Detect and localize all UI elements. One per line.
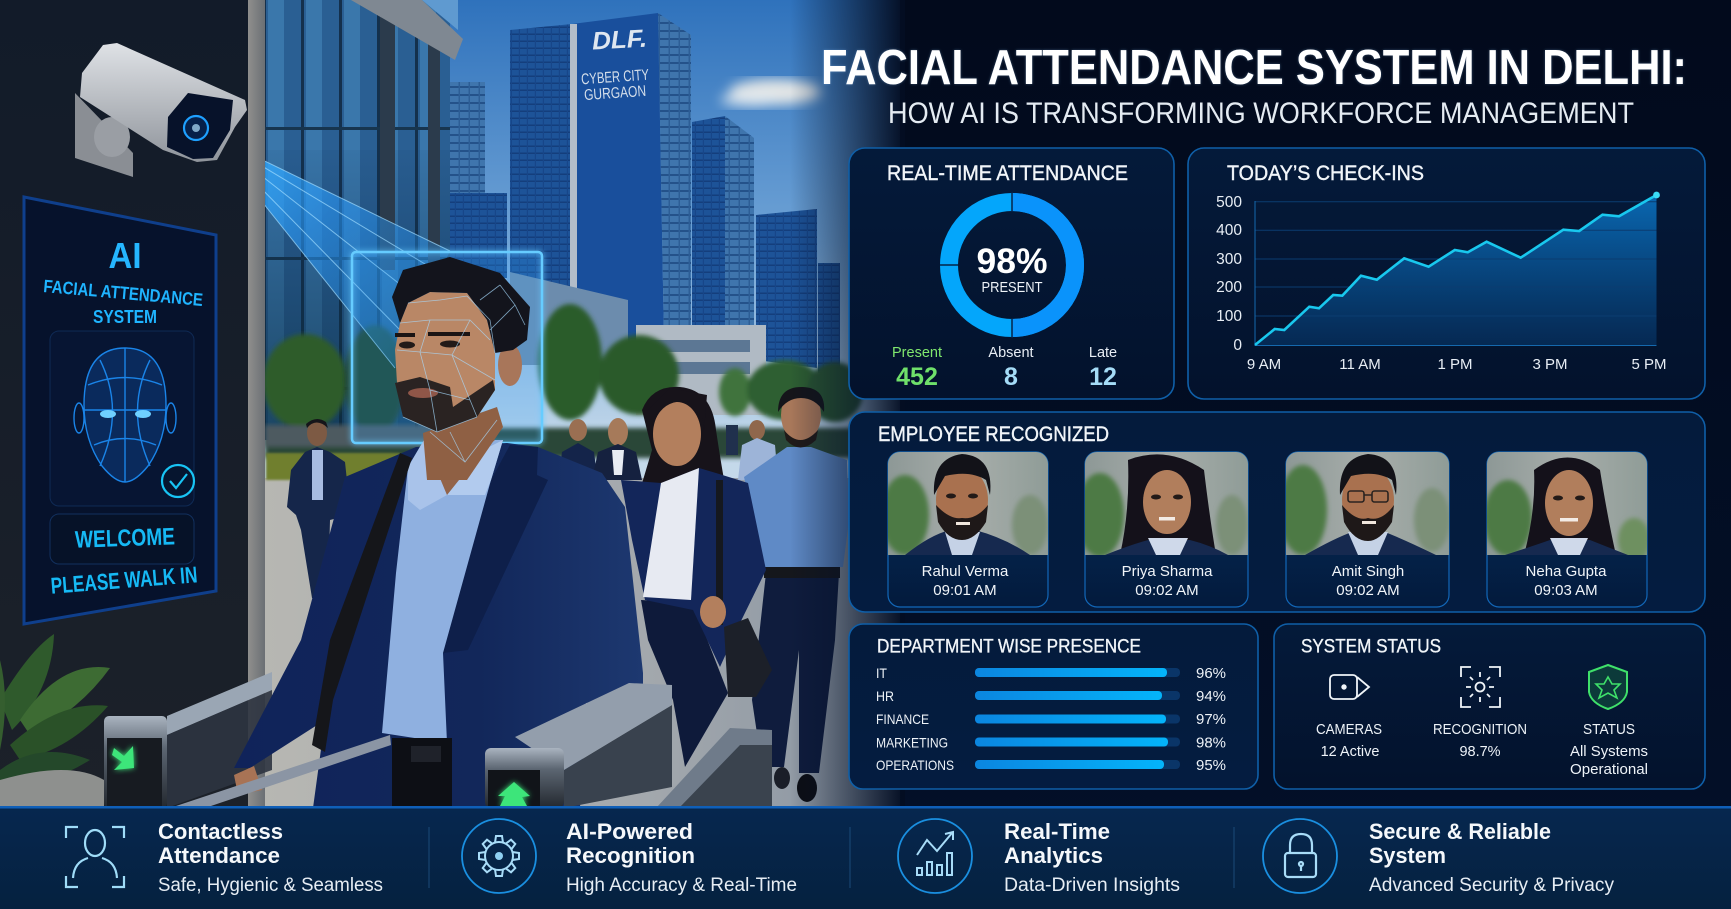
bar row: Marketing — [876, 734, 1226, 752]
y axis labels: 500 — [1216, 194, 1242, 211]
x axis labels — [1247, 356, 1667, 373]
panel: real-time attendance — [849, 148, 1174, 399]
portrait: Neha — [1484, 452, 1650, 562]
bar row: Finance — [876, 711, 1226, 728]
sign heading: system: SYSTEM — [93, 307, 157, 327]
security camera — [75, 43, 247, 177]
feature: secure and reliable system: Secure & Reliable — [1369, 819, 1551, 844]
panel heading: REAL-TIME ATTENDANCE — [887, 162, 1128, 185]
face scan frame — [352, 252, 542, 443]
status: all systems operational: Operational — [1570, 762, 1648, 778]
title — [821, 41, 1687, 130]
trees — [265, 304, 875, 458]
caption: Amit Singh — [1332, 563, 1404, 580]
feature: AI-powered recognition: Recognition — [566, 843, 695, 868]
feature: contactless attendance: Contactless — [158, 819, 283, 844]
building sign: DLF Cyber City Gurgaon: DLF. — [591, 25, 648, 55]
icon: gear in circle — [462, 819, 536, 893]
building sign: DLF Cyber City Gurgaon: CYBER CITY — [581, 67, 650, 88]
subtitle: HOW AI IS TRANSFORMING WORKFORCE MANAGEMENT — [888, 97, 1634, 130]
status: recognition — [1433, 667, 1527, 760]
sign text: please walk in: PLEASE WALK IN — [50, 561, 198, 599]
employee card: Amit Singh — [1279, 452, 1450, 607]
feature: secure and reliable system: Advanced Security & Privacy — [1369, 875, 1614, 896]
stat: absent — [988, 345, 1034, 391]
portrait: Priya — [1076, 452, 1248, 557]
panel heading: TODAY’S CHECK-INS — [1227, 162, 1424, 185]
sign inner box with face scan — [50, 331, 194, 506]
y axis labels — [1216, 194, 1242, 354]
bar row: Finance: 97% — [1196, 712, 1226, 728]
plaza ground — [265, 478, 900, 808]
icon: camera — [1330, 675, 1369, 699]
line chart — [1216, 192, 1667, 373]
feature: AI-powered recognition: AI-Powered — [566, 819, 693, 844]
employee card: Rahul Verma: 09:01 AM — [933, 582, 997, 599]
icon: shield — [1589, 665, 1627, 709]
stat: absent: Absent — [988, 345, 1034, 361]
feature: contactless attendance: Attendance — [158, 843, 280, 868]
y axis labels: 400 — [1216, 222, 1242, 239]
donut chart — [940, 192, 1075, 338]
sign heading: AI: AI — [108, 235, 142, 276]
donut value: 98% — [976, 242, 1048, 281]
icon: green arrow left gate — [112, 746, 134, 770]
feature: real-time analytics: Real-Time — [1004, 819, 1110, 844]
bar row: Operations — [876, 757, 1226, 774]
icon: padlock in circle — [1263, 819, 1337, 893]
donut caption: PRESENT — [982, 279, 1042, 296]
status: all systems operational: All Systems — [1570, 744, 1648, 760]
y axis labels: 300 — [1216, 251, 1242, 268]
feature: AI-powered recognition — [462, 819, 797, 896]
stat: late: Late — [1089, 345, 1117, 361]
icon: check circle — [162, 465, 194, 497]
stat: absent: 8 — [1004, 363, 1018, 391]
panel: department wise presence — [849, 624, 1258, 789]
bar row: Operations: 95% — [1196, 758, 1226, 774]
y axis labels: 200 — [1216, 279, 1242, 296]
bar row: HR: 94% — [1196, 689, 1226, 705]
bar row: Operations: OPERATIONS — [876, 757, 954, 773]
icon: chart in circle — [898, 819, 972, 893]
background towers — [450, 13, 840, 415]
bar row: Marketing: 98% — [1196, 736, 1226, 752]
status: cameras: CAMERAS — [1316, 722, 1382, 738]
welcome box: WELCOME — [75, 523, 175, 554]
scene fade into dashboard — [790, 0, 905, 808]
welcome box — [50, 514, 194, 564]
plant — [0, 634, 110, 808]
wall pillar — [0, 0, 265, 808]
bar row: IT: IT — [876, 665, 887, 681]
status: cameras: 12 Active — [1321, 744, 1379, 760]
building sign: DLF Cyber City Gurgaon: GURGAON — [584, 83, 647, 104]
y axis labels: 0 — [1233, 337, 1242, 354]
status: all systems operational — [1570, 665, 1648, 778]
digital sign panel — [24, 197, 216, 624]
bar row: HR: HR — [876, 688, 894, 704]
stat: present — [892, 345, 942, 391]
bar row: HR — [876, 688, 1226, 705]
stat: present: 452 — [896, 363, 938, 391]
bar row: IT: 96% — [1196, 666, 1226, 682]
employee card: Priya Sharma: 09:02 AM — [1135, 582, 1199, 599]
employee card: Neha Gupta — [1484, 452, 1650, 607]
caption: Rahul Verma — [922, 563, 1009, 580]
face mesh overlay — [397, 285, 525, 462]
x axis labels: 11 AM — [1339, 356, 1381, 373]
caption: Priya Sharma — [1122, 563, 1213, 580]
x axis labels: 9 AM — [1247, 356, 1281, 373]
photo scene: entrance with turnstiles — [0, 0, 900, 808]
panel heading: SYSTEM STATUS — [1301, 636, 1441, 658]
hedge — [266, 453, 400, 480]
feature: contactless attendance — [66, 819, 383, 896]
icon: person in scan frame — [66, 827, 124, 887]
feature: AI-powered recognition: High Accuracy & Real-Time — [566, 875, 797, 896]
portrait: Rahul — [881, 452, 1048, 555]
employee card: Priya Sharma — [1076, 452, 1248, 607]
feature: real-time analytics: Analytics — [1004, 843, 1103, 868]
background cloud — [720, 79, 821, 107]
y axis labels: 100 — [1216, 308, 1242, 325]
left turnstile gate — [104, 672, 272, 808]
status: cameras — [1316, 675, 1382, 760]
feature: real-time analytics — [898, 819, 1180, 896]
sign heading: facial attendance: FACIAL ATTENDANCE — [43, 276, 204, 310]
bottom feature bar — [0, 806, 1731, 909]
portrait: Amit — [1279, 452, 1450, 555]
feature: secure and reliable system: System — [1369, 843, 1446, 868]
bar row: Marketing: MARKETING — [876, 734, 948, 750]
panel: system status — [1274, 624, 1705, 789]
status: all systems operational: STATUS — [1583, 722, 1635, 738]
x axis labels: 3 PM — [1532, 356, 1568, 373]
scan beam from camera — [265, 160, 450, 368]
employee card: Amit Singh: 09:02 AM — [1336, 582, 1400, 599]
icon: camera lens — [184, 116, 208, 140]
feature: contactless attendance: Safe, Hygienic & Seamless — [158, 875, 383, 896]
bar row: IT — [876, 665, 1226, 682]
panel: employee recognized — [849, 412, 1705, 612]
icon: face scan target — [1461, 667, 1500, 707]
x axis labels: 1 PM — [1437, 356, 1473, 373]
panel: today's check-ins — [1188, 148, 1705, 399]
employee card: Rahul Verma — [881, 452, 1048, 607]
x axis labels: 5 PM — [1631, 356, 1667, 373]
icon: green arrow right gate — [498, 782, 530, 806]
stat: late — [1089, 345, 1117, 391]
main man in navy suit — [234, 257, 643, 808]
status: recognition: RECOGNITION — [1433, 722, 1527, 738]
glass office building — [263, 0, 463, 447]
feature: real-time analytics: Data-Driven Insights — [1004, 875, 1180, 896]
bar row: Finance: FINANCE — [876, 711, 929, 727]
woman in navy suit — [621, 387, 772, 767]
panel heading: EMPLOYEE RECOGNIZED — [878, 423, 1109, 446]
status: recognition: 98.7% — [1459, 744, 1501, 760]
building sign: DLF Cyber City Gurgaon — [582, 30, 648, 100]
feature: secure and reliable system — [1263, 819, 1614, 896]
stat: present: Present — [892, 345, 942, 361]
front rail and right turnstile gates — [170, 683, 772, 808]
man with blue shirt in the queue — [744, 387, 849, 802]
caption: Neha Gupta — [1526, 563, 1607, 580]
background pedestrians — [287, 418, 778, 598]
stat: late: 12 — [1089, 363, 1117, 391]
panel heading: DEPARTMENT WISE PRESENCE — [877, 636, 1141, 658]
employee card: Neha Gupta: 09:03 AM — [1534, 582, 1598, 599]
